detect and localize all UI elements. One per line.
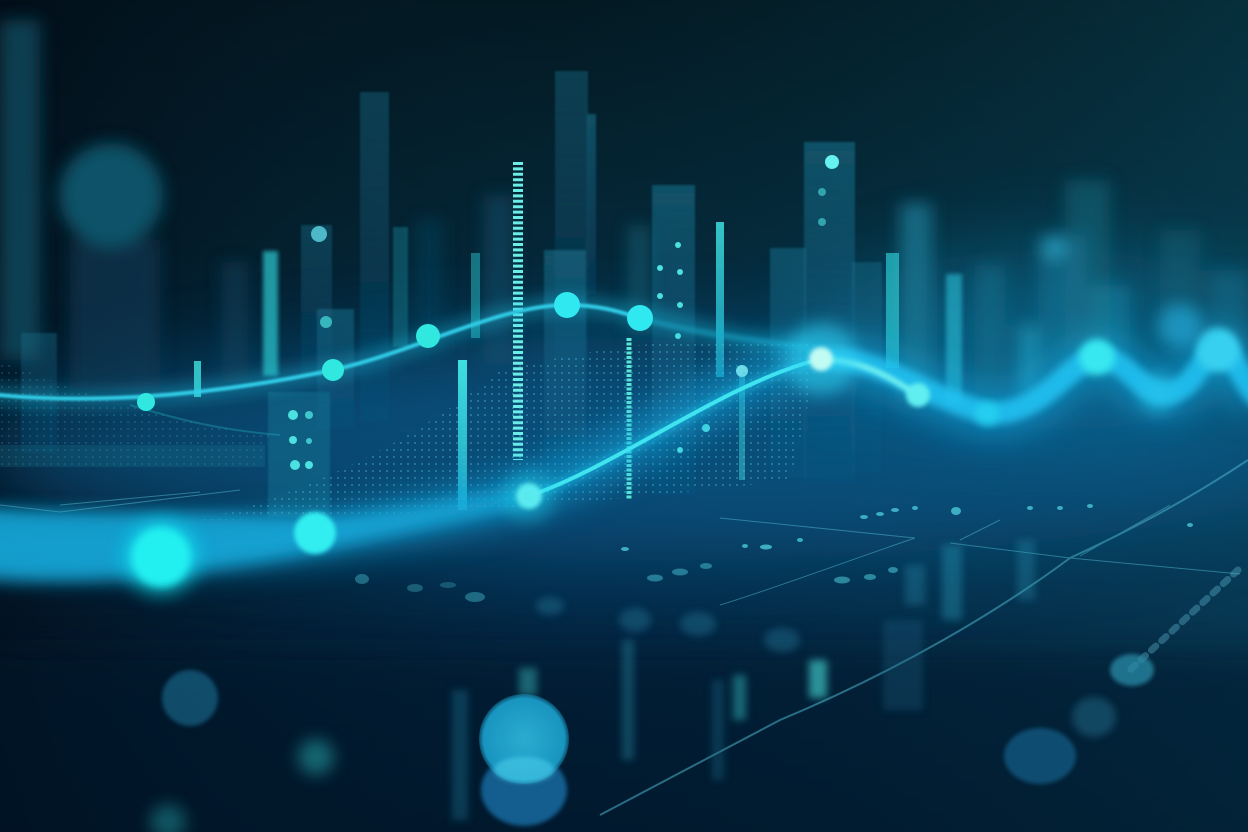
mid-field bars bbox=[21, 71, 882, 517]
dashed ladders bbox=[518, 162, 629, 500]
faded distant floor dots and reflected bars bbox=[452, 540, 1035, 820]
front glowing wave line bbox=[0, 350, 1248, 581]
foreground bokeh orbs bbox=[150, 654, 1154, 832]
bar window dots bbox=[288, 155, 839, 470]
back light wave line bbox=[0, 305, 820, 435]
bright vertical stems bbox=[194, 222, 962, 510]
dotted mesh surfaces bbox=[0, 340, 820, 520]
floor grid lines bbox=[0, 460, 1248, 815]
floor dots bbox=[355, 504, 1238, 670]
blurred far-field bars bbox=[0, 20, 1248, 403]
data point glows bbox=[121, 292, 1240, 597]
